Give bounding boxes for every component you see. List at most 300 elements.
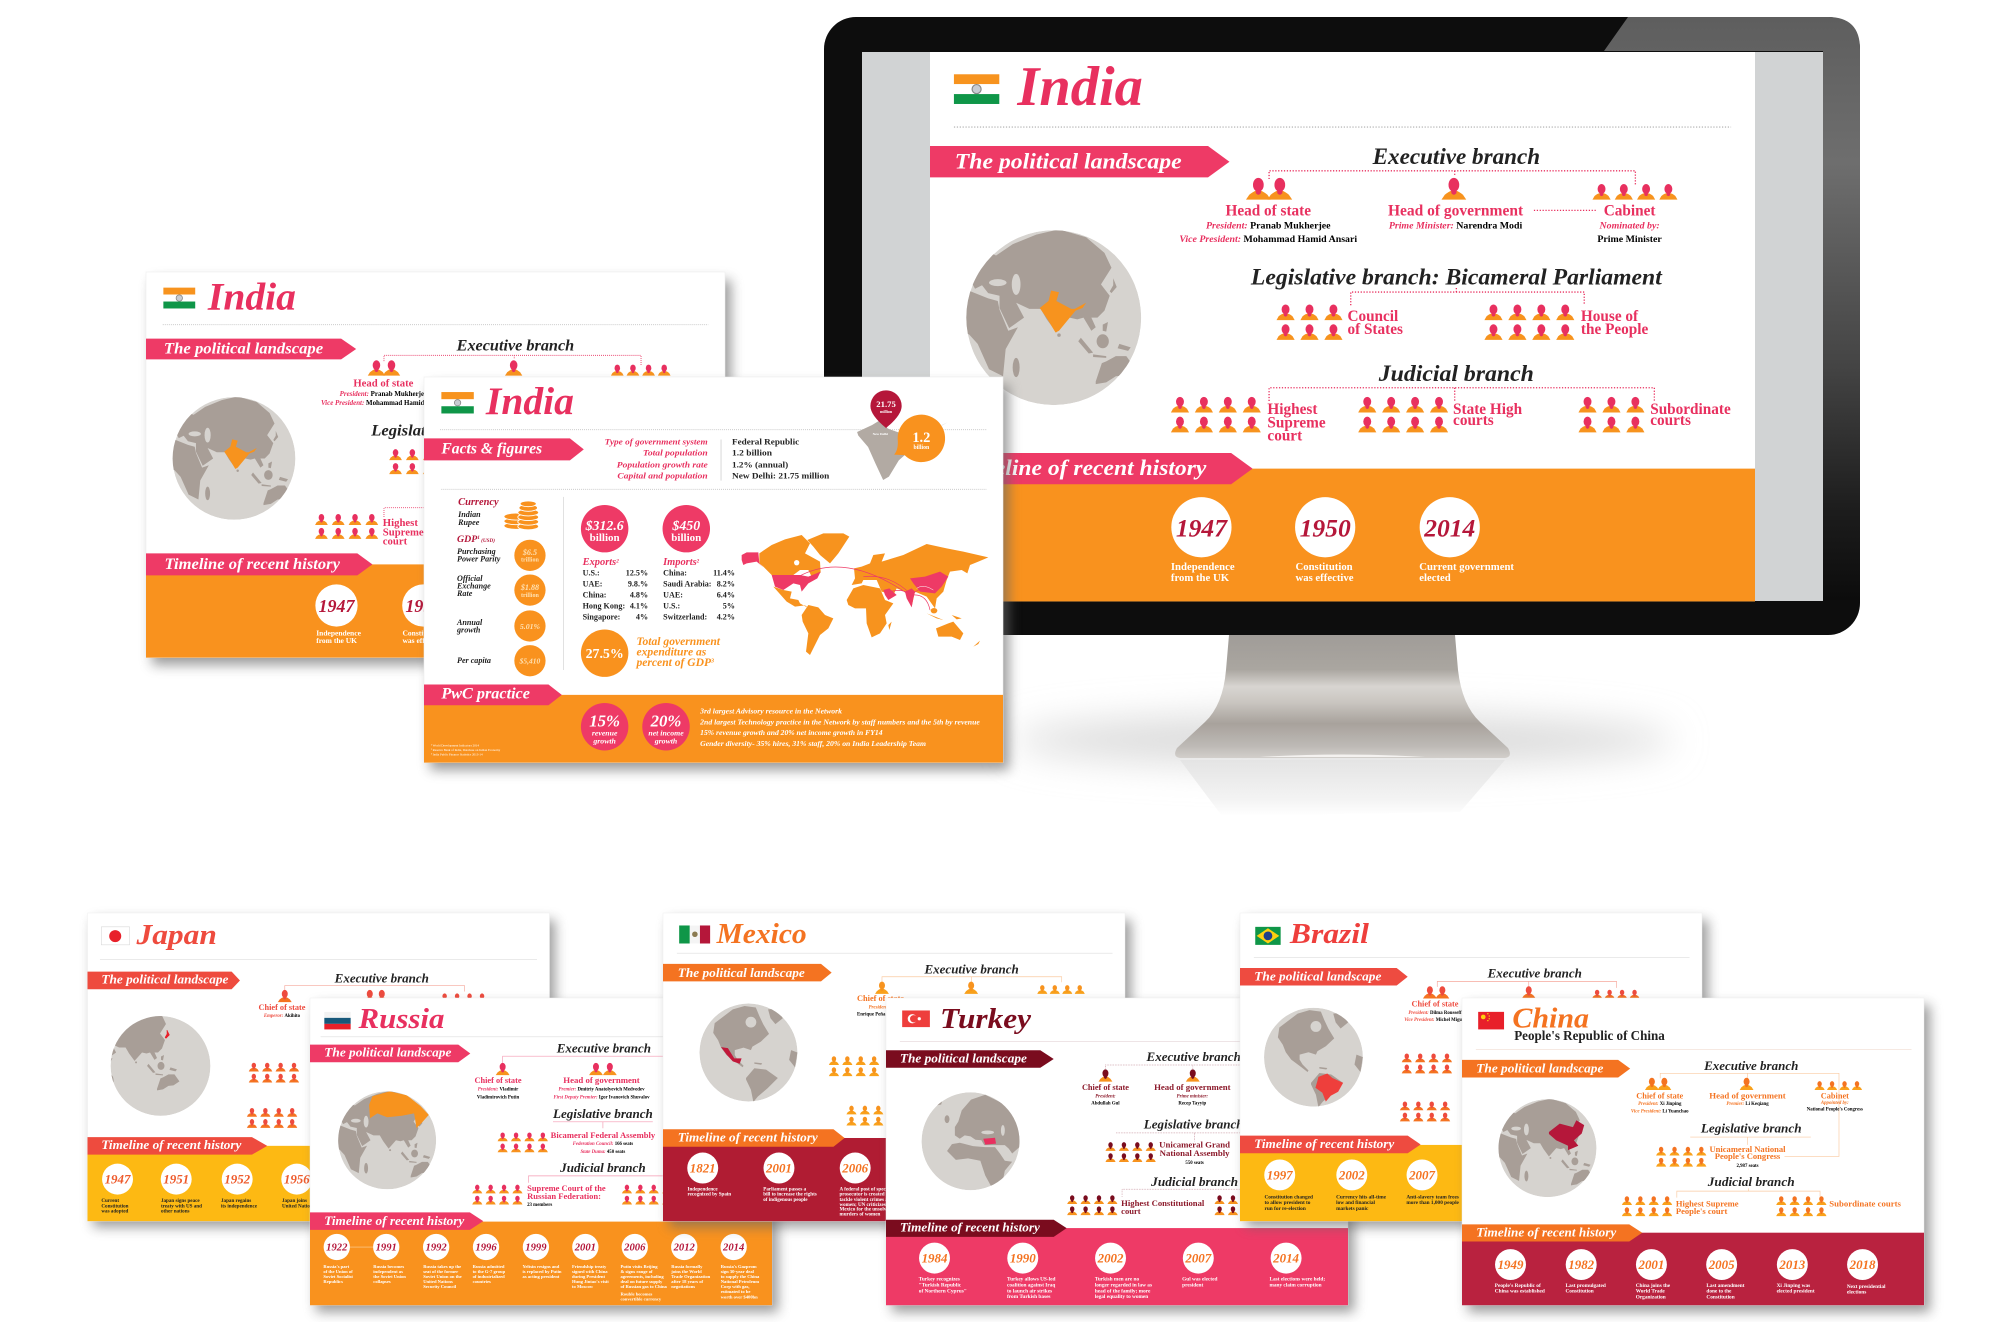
bubble: 20% net income growth: 20% [650, 712, 681, 731]
text: federal assembly: State Duma: 450 seats [580, 1150, 625, 1155]
timeline entry 2006 [620, 1234, 668, 1302]
government expenditure: 27.5% [586, 647, 624, 662]
banner: political landscape [310, 1045, 470, 1062]
purchasing power parity: $6.5 [522, 548, 537, 557]
heading: executive branch: Executive branch [1146, 1049, 1241, 1064]
timeline entry 1984: "Turkish Republic [919, 1282, 962, 1288]
timeline entry 1947: 1947 [105, 1172, 131, 1187]
practice notes: 2nd largest Technology practice in the Network by staff numbers and the 5th by revenue [699, 718, 981, 726]
timeline entry 1990 [1007, 1243, 1055, 1300]
highest supreme court: Supreme [1267, 414, 1326, 431]
timeline entry 2001: 2001 [574, 1243, 596, 1254]
timeline entry 2001: during President [572, 1274, 605, 1279]
icons: legislature [498, 1132, 548, 1152]
timeline entry 2014 [1419, 497, 1514, 584]
timeline entry 2006: deal on future supply [620, 1279, 663, 1284]
banner: timeline: Timeline of recent history [1476, 1225, 1617, 1239]
bubble: 15% revenue growth [581, 703, 628, 750]
supreme court: 23 members [527, 1203, 552, 1208]
house of the people [1484, 304, 1648, 340]
timeline band [146, 564, 725, 658]
GDP heading: (USD) [480, 537, 495, 544]
banner: political landscape [1240, 968, 1408, 986]
text: head of government: Premier: Li Keqiang [1726, 1102, 1769, 1107]
timeline entry 1996: countries [473, 1279, 491, 1284]
timeline entry 2013: elected president [1777, 1288, 1815, 1294]
flag: China [1478, 1012, 1504, 1029]
banner: timeline: Timeline of recent history [678, 1131, 818, 1145]
imports table: 11.4% [713, 569, 735, 578]
GDP heading: GDP [457, 534, 477, 545]
banner: political landscape [886, 1050, 1054, 1068]
timeline entry 2014: to supply the China [721, 1274, 760, 1279]
text: chief of state: Abdullah Gul [1091, 1101, 1120, 1106]
flag: Turkey [902, 1010, 930, 1027]
timeline entry 1947: was adopted [101, 1208, 128, 1214]
per capita [457, 645, 546, 676]
timeline entry 2001: Parliament passes a [763, 1187, 807, 1193]
banner: facts and figures [424, 438, 584, 460]
timeline entry 1949: China was established [1495, 1288, 1545, 1294]
text: head of government: Head of government [563, 1075, 640, 1085]
timeline entry 1990: 1990 [1010, 1251, 1036, 1266]
imports table: 2 [696, 558, 700, 564]
flag: Japan [101, 927, 130, 945]
timeline entry 1949 [1495, 1249, 1545, 1294]
timeline entry 1997: to allow president to [1264, 1200, 1311, 1206]
timeline entry 2007: more than 1,000 people [1406, 1200, 1460, 1206]
timeline entry 1992: Soviet Union on the [423, 1274, 462, 1279]
timeline entry 1991: Russia becomes [373, 1264, 404, 1269]
bubble: 1.2 billion [894, 415, 945, 462]
icons: executive people [1645, 1078, 1862, 1090]
heading: legislative branch: Legislative branch [552, 1106, 653, 1121]
text: head of state: President: Pranab Mukherjee [340, 390, 427, 398]
text: head of government: Prime Minister: Narendra Modi [1389, 221, 1522, 232]
text: chief of state: President: [869, 1006, 889, 1011]
title: Russia [357, 1003, 444, 1035]
timeline entry 1950: 1950 [1300, 513, 1351, 542]
banner: timeline [886, 1220, 1067, 1237]
official exchange rate: Exchange [456, 581, 491, 590]
timeline entry 1952: 1952 [224, 1172, 251, 1187]
currency: Indian [457, 510, 481, 519]
icons: head of state [1246, 178, 1292, 200]
timeline entry 2001: of indigenous people [763, 1197, 808, 1203]
banner: political landscape: The political landscape [164, 341, 323, 358]
practice notes: 15% revenue growth and 20% net income growth in FY14 [700, 729, 883, 737]
world map [742, 533, 988, 655]
text: chief of state: Chief of state [258, 1003, 306, 1012]
timeline entry 2006: Mexico for the unsolved [839, 1207, 892, 1213]
official exchange rate: Official [457, 574, 483, 583]
fact values: 1.2 billion [732, 448, 772, 458]
timeline entry 1947: Constitution [101, 1203, 129, 1209]
bubble: 1.2 billion: billion [913, 445, 930, 451]
globe: Mexico highlighted [699, 1004, 797, 1102]
timeline entry 1922: Soviet Socialist [323, 1274, 353, 1279]
timeline entry 1947: Independence [316, 629, 362, 638]
text: head of state: Head of state [353, 378, 414, 390]
icons: other courts [1214, 1195, 1251, 1215]
timeline entry 1996: 1996 [475, 1243, 497, 1254]
text: head of government: Recep Tayyip [1178, 1101, 1207, 1106]
timeline entry 1991: collapses [373, 1279, 391, 1284]
timeline entry 1982: Constitution [1565, 1288, 1594, 1294]
imports table: U.S.: [663, 602, 680, 611]
timeline entry 2013 [1777, 1249, 1815, 1294]
timeline entry 1990: from Turkish bases [1007, 1294, 1051, 1300]
timeline entry 1999: Yeltsin resigns and [523, 1264, 560, 1269]
supreme court: Supreme Court of the [527, 1184, 606, 1193]
imports table: UAE: [663, 591, 683, 600]
per capita: Per capita [457, 656, 491, 665]
timeline entry 2005: done to the [1706, 1288, 1732, 1294]
text: head of government [1709, 1090, 1786, 1107]
exports bubble [581, 505, 628, 552]
timeline entry 2014: 2014 [1423, 513, 1475, 542]
banner: timeline [1240, 1136, 1421, 1153]
state high courts: State High [1453, 401, 1523, 418]
imports table: China: [663, 569, 687, 578]
text: head of state [1179, 202, 1357, 245]
per capita: $5,410 [519, 657, 541, 666]
text: chief of state [475, 1076, 522, 1100]
text: chief of state: Chief of state [1636, 1091, 1684, 1100]
globe: India highlighted [966, 230, 1141, 405]
highest supreme court: Highest [383, 517, 418, 529]
title: India [1016, 56, 1143, 118]
government expenditure: expenditure as [636, 645, 707, 658]
bubble: 1.2 billion: 1.2 [912, 430, 930, 446]
timeline entry 1947: Independence [1171, 561, 1235, 573]
exports table: 4.1% [630, 602, 648, 611]
timeline entry 2014: estimated to be [721, 1289, 750, 1294]
timeline band [930, 469, 1755, 601]
timeline entry 1950: was effective [1295, 572, 1354, 584]
heading: executive branch: Executive branch [1487, 966, 1582, 981]
flag: Brazil [1255, 927, 1281, 945]
imports bubble: $450 [671, 519, 700, 534]
timeline entry 1992 [423, 1234, 462, 1289]
globe: China highlighted [1498, 1099, 1596, 1197]
timeline entry 1949: 1949 [1498, 1257, 1524, 1272]
timeline entry 2006: 2006 [623, 1243, 646, 1254]
panel: Japan [62, 913, 555, 1227]
icons: executive people [368, 360, 671, 376]
heading: judicial branch: Judicial branch [559, 1160, 646, 1175]
imports table: Imports [663, 557, 697, 568]
timeline entry 2006: & signs range of [620, 1269, 653, 1274]
constitutional court [1067, 1195, 1205, 1216]
flag: Mexico [679, 925, 710, 943]
timeline entry 2018: elections [1847, 1290, 1866, 1296]
banner: timeline [1462, 1224, 1642, 1241]
timeline entry 2001: bill to increase the rights [763, 1192, 817, 1198]
exports table: Exports [583, 557, 616, 568]
text: cabinet [1597, 202, 1662, 245]
state high courts [1358, 397, 1523, 432]
GDP heading: 1 [477, 535, 480, 541]
text: cabinet: Appointed by: [1820, 1101, 1849, 1106]
exports table: China: [583, 591, 606, 600]
icons: executive people [278, 990, 487, 1002]
timeline entry 2007 [1182, 1243, 1218, 1288]
highest supreme court [1171, 397, 1326, 445]
council of states: Council [1347, 308, 1398, 325]
text: chief of state [1631, 1091, 1689, 1115]
text: cabinet [1807, 1091, 1863, 1112]
fact labels: Population growth rate [617, 459, 708, 469]
timeline entry 1996: of industrialized [473, 1274, 505, 1279]
text: head of government: Head of government [1709, 1090, 1786, 1100]
globe: Turkey highlighted [922, 1092, 1020, 1190]
icon: coins [504, 501, 539, 530]
text: chief of state: Emperor: Akihito [263, 1014, 301, 1019]
timeline entry 2002 [1095, 1243, 1152, 1300]
banner: timeline [930, 453, 1253, 484]
timeline entry 1990: Turkey allows US-led [1007, 1277, 1055, 1283]
text: cabinet: Cabinet [1604, 202, 1656, 219]
grand national assembly [1105, 1140, 1230, 1166]
footnotes: ² Reserve Bank of India, Database on Indian Economy [431, 748, 501, 753]
timeline entry 2001 [1636, 1249, 1671, 1300]
text: head of government: Prime minister: [1177, 1094, 1208, 1099]
text: chief of state: President: Vladimir [478, 1087, 519, 1092]
monitor stand [1175, 635, 1510, 816]
timeline entry 1952 [221, 1164, 258, 1209]
timeline entry 2014 [720, 1234, 760, 1299]
icons: executive people [875, 982, 1085, 994]
national people's congress [1656, 1144, 1786, 1169]
currency [457, 497, 539, 530]
banner: political landscape [930, 146, 1229, 177]
text: chief of state: President: [1095, 1094, 1116, 1099]
banner: timeline: Timeline of recent history [101, 1138, 242, 1152]
highest supreme court: Highest [1267, 401, 1318, 418]
timeline entry 1922: Republics [323, 1279, 343, 1284]
timeline entry 2001 [763, 1153, 817, 1203]
text: head of government [1388, 202, 1524, 232]
panel: India political landscape card (back) [146, 272, 731, 665]
timeline entry 1956 [281, 1164, 315, 1209]
currency: Currency [458, 497, 499, 508]
timeline entry 2018: Next presidential [1847, 1284, 1886, 1290]
timeline entry 1992: 1992 [426, 1243, 447, 1254]
timeline entry 2006: 2006 [841, 1161, 869, 1176]
footnotes [431, 743, 501, 757]
heading: judicial branch: Judicial branch [1378, 360, 1534, 386]
timeline entry 1996: to the G-7 group [473, 1269, 506, 1274]
pin: 21.75 million: million [880, 409, 893, 414]
timeline entry 1982: 1982 [1568, 1257, 1595, 1272]
footnotes: ³ India Public Finance Statistics 2013-14 [431, 753, 483, 757]
panel: Mexico [663, 913, 1131, 1227]
timeline entry 2012: Russia formally [671, 1264, 703, 1269]
timeline entry 1952: its independence [221, 1203, 258, 1209]
heading: executive branch: Executive branch [556, 1041, 651, 1056]
timeline entry 1922: of the Union of [323, 1269, 353, 1274]
text: federal assembly: Federation Council: 166 seats [573, 1142, 633, 1147]
annual growth [456, 610, 546, 642]
text: head of government: First Deputy Premier: Igor Ivanovich Shuvalov [553, 1095, 650, 1100]
fact values: 1.2% (annual) [732, 459, 788, 469]
timeline entry 2007: Anti-slavery team frees [1406, 1195, 1459, 1201]
imports bubble [663, 505, 710, 552]
icon: head of government [1442, 178, 1466, 200]
official exchange rate: Rate [456, 589, 473, 598]
text: head of state: President: Pranab Mukherjee [1206, 221, 1331, 232]
banner: timeline: Timeline of recent history [1254, 1137, 1395, 1151]
imports table: Switzerland: [663, 613, 707, 622]
subordinate courts [1578, 397, 1731, 432]
title: India [485, 379, 574, 423]
heading: executive branch: Executive branch [1703, 1058, 1798, 1073]
timeline entry 2001: Organization [1636, 1294, 1666, 1300]
timeline entry 1999: is replaced by Putin [523, 1269, 562, 1274]
timeline entry 2014: National Petroleum [721, 1279, 759, 1284]
banner: PwC practice [424, 684, 562, 705]
globe: Japan highlighted [110, 1016, 210, 1116]
text: federal assembly [551, 1131, 656, 1155]
banner: timeline: Timeline of recent history [324, 1214, 465, 1228]
timeline entry 2007: 2007 [1408, 1168, 1435, 1183]
panel: Russia [310, 998, 778, 1312]
title: Japan [135, 919, 217, 951]
text: head of state [321, 378, 446, 407]
timeline entry 1984: Turkey recognizes [919, 1277, 960, 1283]
highest supreme court: Supreme [383, 526, 424, 538]
banner: political landscape [146, 339, 356, 359]
timeline entry 1996 [473, 1234, 506, 1284]
timeline entry 2014: Last elections were held; [1269, 1277, 1325, 1283]
practice band [424, 695, 1003, 763]
imports table: 4.2% [717, 613, 735, 622]
banner: political landscape: The political landscape [678, 966, 805, 980]
heading: legislative branch: Legislative branch: Bicameral Parliament [1250, 264, 1662, 290]
fact values: Federal Republic [732, 437, 799, 447]
timeline entry 1951: treaty with US and [161, 1203, 202, 1209]
timeline entry 1997: run for re-election [1264, 1206, 1306, 1212]
supreme court [472, 1184, 606, 1208]
banner: political landscape: The political landscape [955, 148, 1182, 173]
timeline entry 2005: Last amendment [1706, 1283, 1745, 1289]
text: chief of state: Chief of state [475, 1076, 522, 1085]
government expenditure: Total government [636, 635, 721, 648]
heading: executive branch: Executive branch [1372, 143, 1540, 169]
purchasing power parity: trillion [521, 558, 540, 564]
timeline entry 2005 [1706, 1249, 1745, 1300]
timeline entry 2001: Friendship treaty [572, 1264, 607, 1269]
timeline entry 2005: Constitution [1706, 1294, 1735, 1300]
timeline entry 1982 [1565, 1249, 1606, 1294]
timeline entry 2002: 2002 [1338, 1168, 1365, 1183]
timeline entry 1999 [523, 1234, 562, 1279]
banner: political landscape [88, 972, 240, 989]
timeline entry 1821 [687, 1153, 731, 1198]
timeline entry 2006: prosecutor is created to [839, 1192, 891, 1198]
banner: political landscape: The political landscape [101, 973, 229, 987]
timeline entry 2006: tackle violent crimes against [839, 1197, 901, 1203]
exports table: 2 [615, 558, 619, 564]
heading: legislative branch: Legislative branch [1700, 1120, 1802, 1135]
timeline entry 2002: head of the family; more [1095, 1288, 1151, 1294]
timeline entry 1821: 1821 [690, 1161, 716, 1176]
icons: executive people [1099, 1069, 1200, 1082]
highest supreme court: court [1267, 428, 1303, 445]
timeline band [663, 1138, 1125, 1221]
purchasing power parity: Power Parity [457, 555, 501, 564]
timeline entry 1947: from the UK [316, 636, 357, 645]
currency: Rupee [457, 518, 480, 527]
imports bubble: billion [671, 532, 701, 544]
timeline entry 1950: Constitution [402, 629, 443, 638]
timeline entry 1956: United Nations [282, 1203, 315, 1209]
imports table: Saudi Arabia: [663, 580, 711, 589]
timeline entry 1951: other nations [161, 1208, 190, 1214]
timeline entry 1821: Independence [687, 1187, 718, 1193]
constitutional court: court [1121, 1206, 1141, 1216]
highest supreme court: court [383, 536, 408, 548]
timeline entry 1950 [1295, 497, 1355, 584]
text: chief of state: President: Xi Jinping [1638, 1102, 1682, 1107]
exports table: UAE: [583, 580, 602, 589]
timeline entry 1991: the Soviet Union [373, 1274, 406, 1279]
banner: PwC practice: PwC practice [441, 685, 530, 702]
national people's congress: Unicameral National [1709, 1144, 1786, 1154]
timeline entry 2012: after 18 years of [671, 1279, 704, 1284]
icons: executive people [1423, 986, 1640, 998]
timeline entry 1947 [315, 584, 362, 645]
text: chief of state [1404, 999, 1466, 1023]
panel: Turkey [886, 998, 1354, 1312]
panel: India political landscape on screen [930, 52, 1755, 601]
icons: judiciary [1400, 1101, 1450, 1121]
government expenditure: 3 [710, 658, 714, 664]
timeline entry 1950: Constitution [1295, 561, 1353, 573]
heading: executive branch: Executive branch [334, 970, 429, 985]
timeline entry 1992: Russia takes up the [423, 1264, 461, 1269]
timeline entry 1952: Japan regains [221, 1198, 251, 1204]
official exchange rate [456, 574, 546, 606]
timeline entry 1990: to launch air strikes [1007, 1288, 1052, 1294]
exports table: Singapore: [583, 613, 620, 622]
supreme court: Russian Federation: [527, 1192, 601, 1201]
timeline entry 1992: Security Council [423, 1284, 457, 1289]
timeline entry 1949: People's Republic of [1495, 1283, 1541, 1289]
fact labels: Type of government system [605, 437, 708, 447]
timeline entry 2018: 2018 [1849, 1257, 1876, 1272]
timeline entry 1947 [1171, 497, 1235, 584]
exports table: 4.8% [630, 591, 648, 600]
imports table: 6.4% [717, 591, 735, 600]
government expenditure [581, 629, 721, 677]
grand national assembly: National Assembly [1160, 1148, 1230, 1158]
banner: timeline: Timeline of recent history [956, 455, 1206, 480]
highest supreme court: Highest Supreme [1676, 1198, 1739, 1208]
timeline entry 2006: Putin visits Beijing [620, 1264, 658, 1269]
timeline entry 2006: women; UN criticizes [839, 1202, 886, 1208]
banner: political landscape: The political landscape [900, 1052, 1027, 1066]
bubble: 15% revenue growth: growth [592, 737, 616, 746]
timeline entry 2001: Hung Jintao's visit [572, 1279, 609, 1284]
timeline entry 1990: coalition against Iraq [1007, 1282, 1055, 1288]
subtitle: People's Republic of China [1514, 1028, 1665, 1043]
timeline entry 2002: longer regarded in law as [1095, 1282, 1152, 1288]
banner: facts and figures: Facts & figures [440, 440, 542, 457]
timeline entry 1947: from the UK [1171, 572, 1230, 584]
timeline entry 1997: 1997 [1267, 1168, 1293, 1183]
